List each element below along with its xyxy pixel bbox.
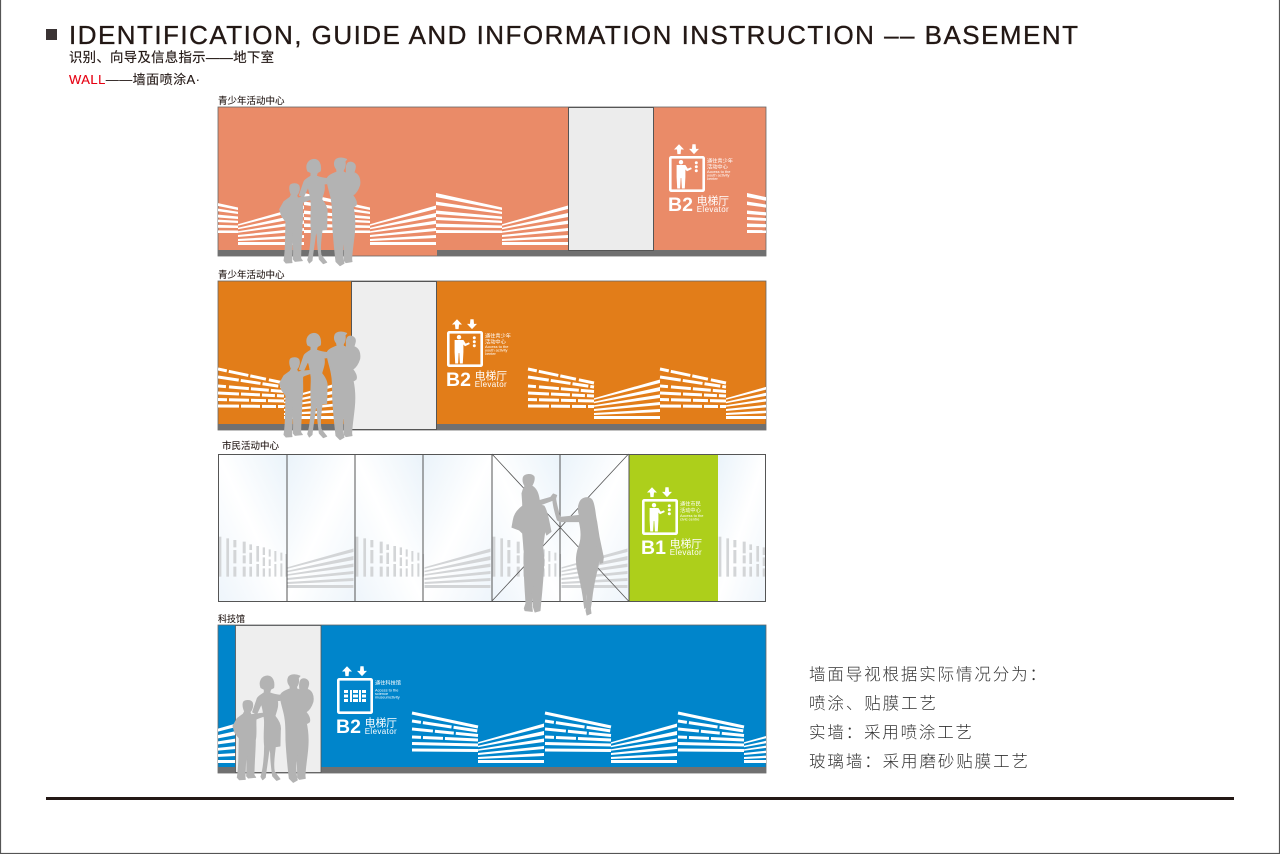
- elevator sign: center: [485, 351, 497, 356]
- elevator sign: youth activity: [707, 172, 730, 177]
- elevator sign: Elevator: [365, 727, 397, 736]
- elevator sign: 活动中心: [680, 506, 701, 514]
- stripe graphics: [218, 712, 766, 763]
- description text: [809, 665, 1046, 771]
- door: [568, 108, 654, 250]
- elevator sign: 通往青少年: [707, 156, 733, 164]
- floor strip: [218, 250, 766, 256]
- description text: 实墙：采用喷涂工艺: [809, 723, 972, 742]
- panel label: 青少年活动中心: [218, 269, 285, 281]
- description text: 喷涂、贴膜工艺: [809, 694, 936, 713]
- elevator sign: [336, 666, 401, 738]
- elevator sign: Access to the: [707, 169, 730, 174]
- silhouette: family: [280, 158, 360, 266]
- section label: WALL——墙面喷涂A·: [69, 72, 200, 87]
- elevator sign: 电梯厅: [697, 194, 729, 208]
- elevator sign: 活动中心: [707, 162, 728, 170]
- wall: [218, 107, 766, 256]
- description text: 玻璃墙：采用磨砂贴膜工艺: [809, 752, 1028, 771]
- floor strip: [218, 424, 766, 430]
- elevator sign: [668, 144, 733, 216]
- elevator sign: center: [707, 176, 719, 181]
- floor strip: [218, 767, 766, 773]
- elevator sign: B2: [446, 369, 471, 391]
- elevator sign: Access to the: [375, 688, 398, 692]
- door: [352, 282, 436, 430]
- elevator sign: civic centre: [680, 516, 699, 521]
- elevator sign: 电梯厅: [475, 370, 507, 382]
- glass wall: [218, 454, 766, 601]
- panel label: 科技馆: [218, 613, 245, 624]
- panel label: 市民活动中心: [222, 440, 280, 452]
- elevator sign: 通往市民: [680, 499, 701, 507]
- title: IDENTIFICATION, GUIDE AND INFORMATION INSTRUCTION –– BASEMENT: [69, 20, 1078, 50]
- wall: [218, 625, 766, 773]
- silhouette: family: [280, 332, 360, 440]
- silhouette: family: [233, 675, 313, 782]
- stripe graphics: [218, 193, 766, 245]
- elevator sign: youth activity: [485, 347, 508, 352]
- elevator sign: museumctivity: [375, 695, 400, 700]
- glass frame and dividers: [218, 454, 766, 602]
- wall: [218, 281, 766, 430]
- panel: youth activity center elevation A: [218, 96, 766, 266]
- elevator sign: Elevator: [697, 205, 729, 214]
- elevator sign: Elevator: [475, 380, 507, 389]
- elevator sign: 活动中心: [485, 337, 506, 345]
- panel label: 青少年活动中心: [218, 95, 285, 107]
- green elevator wall: [629, 454, 718, 601]
- elevator sign: B2: [336, 716, 361, 738]
- elevator sign: 通往青少年: [485, 331, 511, 339]
- elevator sign: [641, 487, 703, 559]
- elevator sign: 电梯厅: [670, 538, 702, 550]
- elevator sign: B1: [641, 537, 666, 559]
- panel: youth activity center elevation B: [218, 269, 792, 440]
- panel: science museum: [218, 614, 766, 783]
- subtitle: 识别、向导及信息指示——地下室: [69, 49, 274, 65]
- elevator sign: Elevator: [670, 548, 702, 557]
- elevator sign: science: [375, 691, 388, 696]
- door: [236, 626, 321, 772]
- icon: title square: [46, 29, 57, 40]
- panel: civic activity center glass wall: [218, 440, 787, 615]
- elevator sign: Access to the: [680, 513, 703, 518]
- title block: [46, 20, 1078, 87]
- elevator sign: Access to the: [485, 344, 508, 349]
- description text: 墙面导视根据实际情况分为：: [809, 665, 1046, 684]
- elevator sign: [446, 319, 511, 391]
- frosted film stripes: [219, 537, 787, 588]
- stripe graphics: [218, 369, 792, 419]
- elevator sign: 通往科技馆: [375, 678, 401, 686]
- elevator sign: B2: [668, 194, 693, 216]
- silhouette: father with child and woman: [512, 474, 603, 615]
- elevator sign: 电梯厅: [365, 716, 397, 730]
- bottom rule: [46, 797, 1234, 800]
